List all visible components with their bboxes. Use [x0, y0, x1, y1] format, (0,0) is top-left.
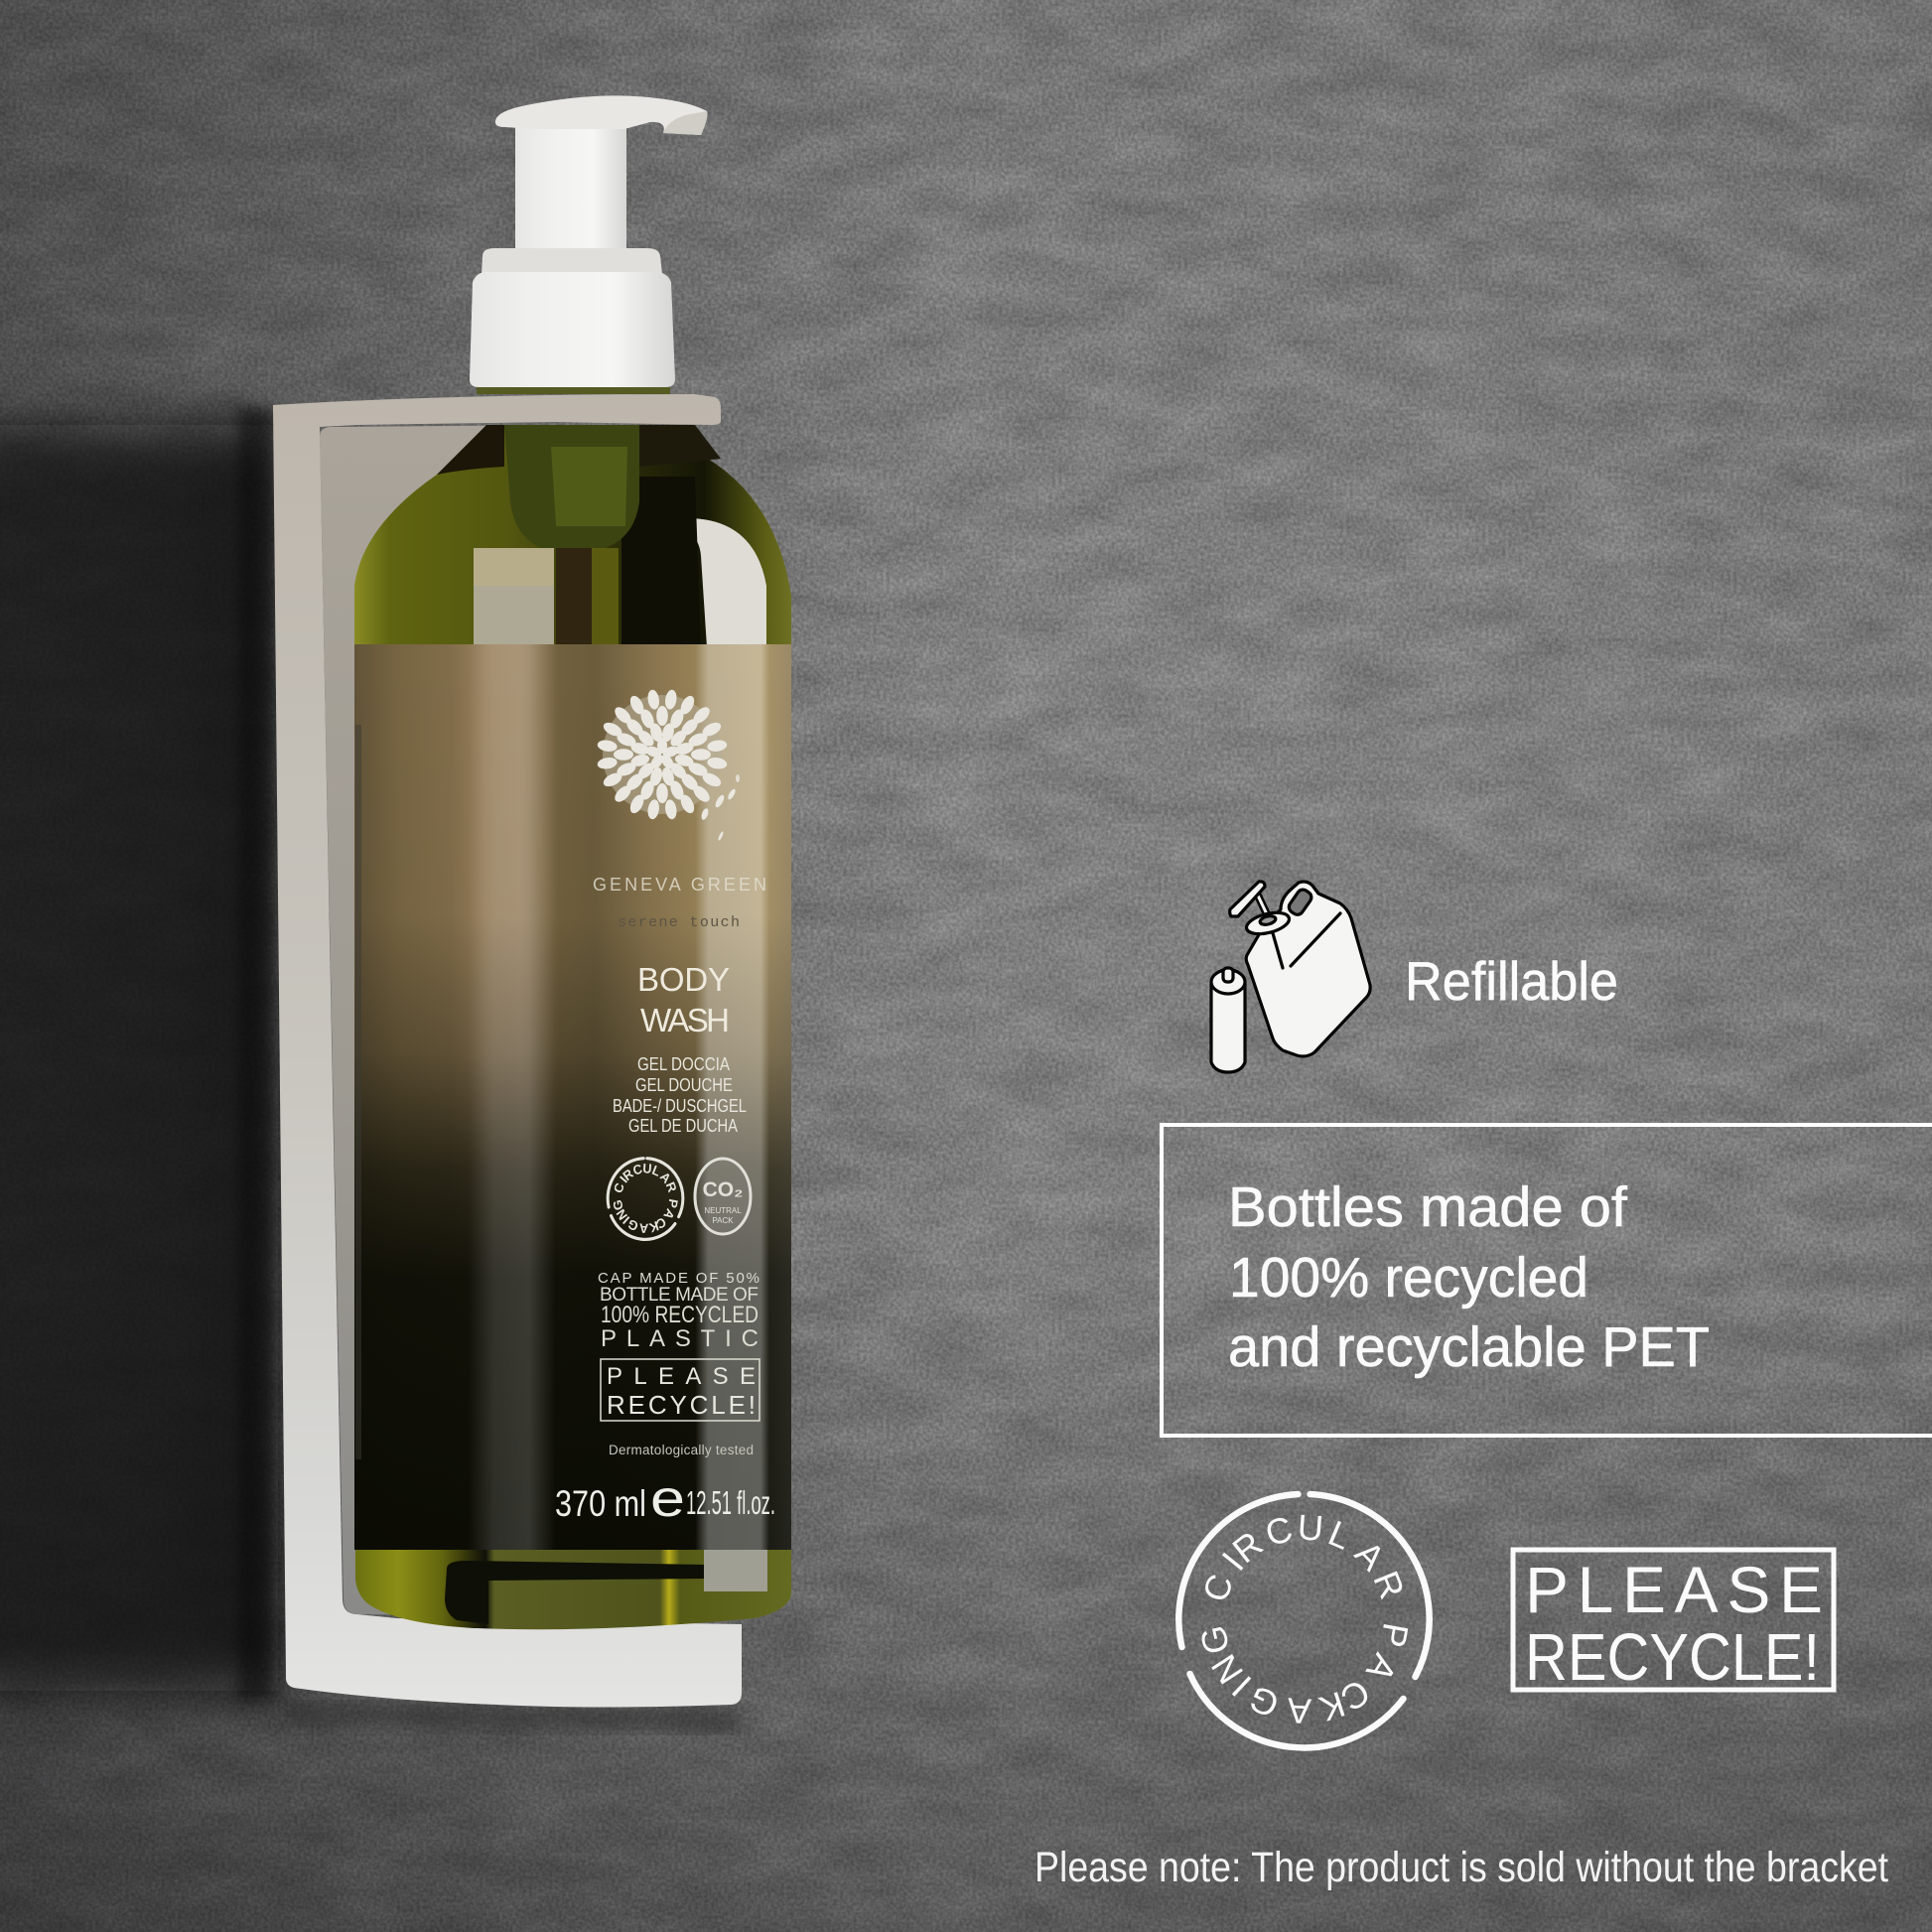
please recycle small box: [601, 1359, 759, 1421]
volume: [555, 1470, 775, 1528]
badge: circular packaging small: P: [665, 1197, 681, 1209]
recycled statement: [598, 1270, 759, 1352]
badge: circular packaging: I: [1224, 1668, 1259, 1705]
badge: circular packaging: R: [1225, 1523, 1270, 1571]
bottle highlights: [474, 548, 554, 647]
badge: circular packaging: U: [1297, 1506, 1324, 1549]
badge: CO2 neutral pack: CO₂: [703, 1178, 743, 1201]
product label: [354, 644, 791, 1550]
badge: circular packaging: R: [1365, 1566, 1413, 1604]
product title: [637, 961, 730, 1038]
bottle shoulder: [354, 425, 791, 650]
badge: circular packaging small: G: [625, 1216, 640, 1234]
pump dispenser: [470, 95, 707, 394]
badge: circular packaging small: R: [663, 1179, 680, 1195]
badge: circular packaging small: A: [660, 1206, 678, 1223]
bracket inner panel: [320, 425, 556, 1616]
translations: GEL DOCCIA: [637, 1054, 730, 1074]
badge: please recycle: PLEASE: [1525, 1553, 1823, 1626]
translations: [613, 1054, 747, 1136]
badge: circular packaging small: N: [614, 1206, 630, 1223]
pump cap: [470, 272, 675, 387]
badge: circular packaging small: A: [638, 1220, 648, 1236]
dermatologically tested: Dermatologically tested: [609, 1443, 754, 1457]
pump stem: [515, 124, 626, 253]
recycled statement: 100% RECYCLED: [601, 1302, 759, 1328]
badge: circular packaging small: C: [653, 1214, 669, 1233]
badge: circular packaging: N: [1203, 1647, 1251, 1691]
bracket cast shadow on wall: [0, 409, 740, 1732]
translations: GEL DE DUCHA: [628, 1116, 738, 1136]
bottle base: [355, 1544, 791, 1629]
label: Refillable: Refillable: [1405, 950, 1618, 1012]
badge: circular packaging: G: [1242, 1678, 1286, 1726]
logo: leaf flower: [597, 689, 740, 841]
statement text: and recyclable PET: [1228, 1315, 1710, 1379]
statement text: [1228, 1175, 1710, 1379]
bottle: [354, 425, 791, 1629]
badge: circular packaging: L: [1322, 1512, 1357, 1558]
badge: circular packaging: K: [1314, 1684, 1350, 1729]
recycled statement: CAP MADE OF 50%: [598, 1270, 759, 1287]
statement text: 100% recycled: [1229, 1246, 1588, 1310]
brand subtitle: serene touch: [618, 914, 740, 931]
badge: circular packaging small: A: [657, 1169, 674, 1186]
refill canister: [1246, 882, 1370, 1056]
volume: 12.51 fl.oz.: [686, 1484, 775, 1521]
volume: e: [650, 1470, 685, 1528]
badge: circular packaging: C: [1194, 1569, 1241, 1607]
product title: BODY: [637, 961, 730, 998]
badge: circular packaging small: I: [620, 1213, 632, 1227]
wall bracket: [273, 394, 742, 1708]
badge: please recycle: RECYCLE!: [1525, 1620, 1820, 1695]
bottle neck ring: [477, 387, 670, 394]
badge: circular packaging: C: [1333, 1671, 1377, 1720]
small bottle: [1211, 969, 1245, 1072]
badge: CO2 neutral pack: PACK: [712, 1216, 734, 1225]
badge: circular packaging: I: [1214, 1545, 1252, 1579]
badge: circular packaging: A: [1347, 1533, 1393, 1579]
pump tool: [1258, 896, 1268, 916]
badge: circular packaging: G: [1191, 1622, 1237, 1658]
badge: circular packaging: A: [1358, 1647, 1406, 1689]
panel: recycled PET statement: [1162, 1125, 1932, 1436]
badge: circular packaging: P: [1372, 1620, 1417, 1650]
volume: 370 ml: [555, 1483, 646, 1524]
badge: circular packaging small: R: [620, 1166, 636, 1183]
badge: circular packaging small: K: [647, 1218, 660, 1236]
statement text: Bottles made of: [1228, 1175, 1627, 1239]
badge: circular packaging small: L: [650, 1162, 662, 1179]
badge: circular packaging small: I: [617, 1173, 630, 1185]
badge: CO2 neutral pack: NEUTRAL: [704, 1206, 742, 1215]
translations: BADE-/ DUSCHGEL: [613, 1096, 747, 1116]
badge: circular packaging: A: [1287, 1690, 1312, 1731]
badge: circular packaging: C: [1261, 1508, 1297, 1554]
badge: circular packaging small: U: [642, 1161, 652, 1176]
badge: circular packaging small: C: [631, 1161, 644, 1178]
badge: circular packaging small: [608, 1159, 683, 1239]
product title: WASH: [640, 1002, 730, 1038]
pump tube: [504, 425, 639, 645]
badge: circular packaging: [1178, 1494, 1430, 1747]
pump collar: [482, 248, 662, 274]
badge: please recycle: [1513, 1550, 1834, 1695]
recycled statement: BOTTLE MADE OF: [600, 1285, 759, 1306]
icon: refill canister and bottle: [1211, 882, 1370, 1072]
please recycle small box: PLEASE: [607, 1363, 756, 1390]
recycled statement: PLASTIC: [601, 1325, 759, 1352]
please recycle small box: RECYCLE!: [607, 1390, 756, 1420]
translations: GEL DOUCHE: [635, 1075, 733, 1095]
badge: circular packaging small: G: [610, 1198, 626, 1212]
badge: CO2 neutral pack: [695, 1159, 751, 1234]
brand name: GENEVA GREEN: [593, 875, 766, 895]
pump head: [495, 95, 707, 135]
badge: circular packaging small: C: [611, 1180, 627, 1195]
